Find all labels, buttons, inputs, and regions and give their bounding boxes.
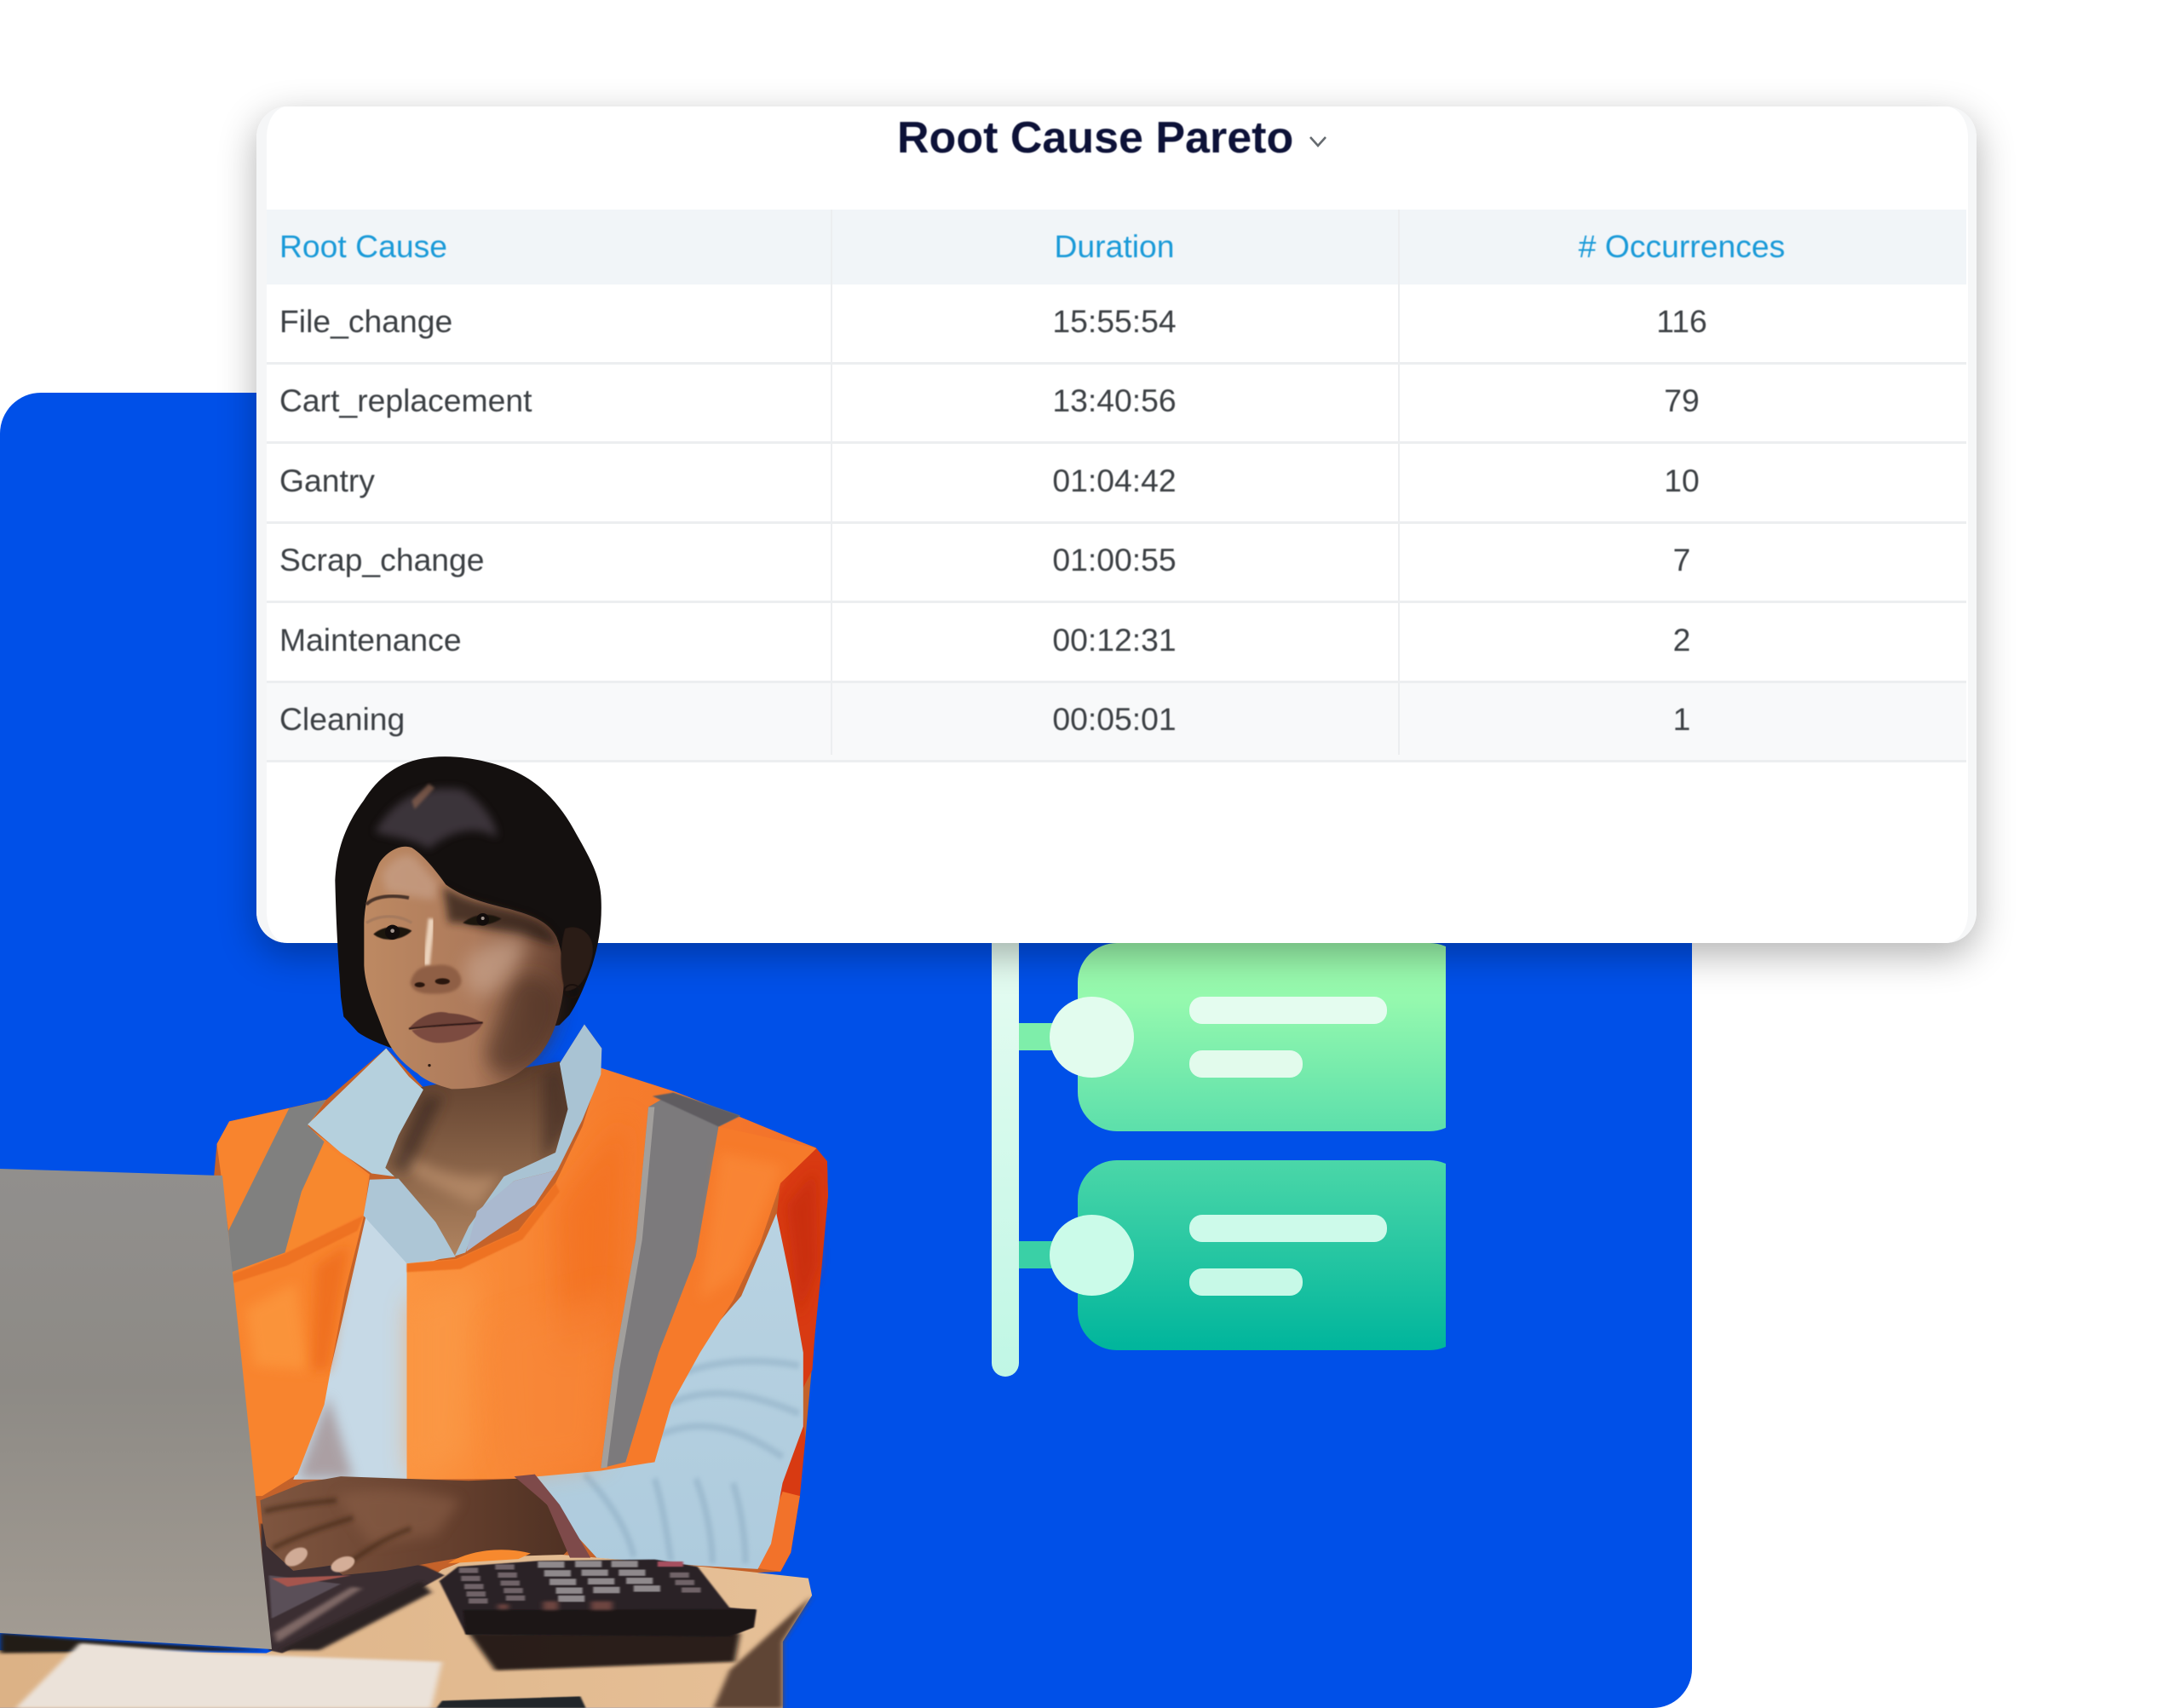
desk side shade [714,1596,812,1708]
face [364,847,564,1089]
eyebrow [366,896,409,905]
row: File_change: File_change [279,303,452,339]
mole [428,1064,431,1067]
row: File_change: 15:55:54 [1052,303,1177,339]
row: Cart_replacement: Cart_replacement [279,382,532,418]
calculator keys [459,1564,700,1603]
row: Cleaning: 00:05:01 [1052,701,1177,737]
table header row [267,210,1966,285]
row: File_change: 116 [1656,303,1707,339]
panel: root cause table card [256,106,1977,943]
forehead highlight [382,855,437,900]
panel: blue background [0,393,1692,1708]
row: Cart_replacement: 79 [1664,382,1700,418]
torso: pale fleece shirt [293,1183,452,1480]
row: Cleaning [279,701,1690,738]
laptop keyboard base [261,1523,445,1653]
body backing silhouette [204,1025,828,1587]
calculator [440,1560,757,1636]
vest back, red inner lining [741,1147,828,1572]
row: Scrap_change: Scrap_change [279,542,485,578]
table: wooden desk [0,1552,812,1708]
row: Cleaning: Cleaning [279,701,405,737]
row: Scrap_change: 7 [1673,542,1690,578]
vest: left panel [217,1100,370,1496]
nose highlight [427,918,432,965]
left eye [373,927,411,940]
notebook on desk [16,1643,586,1708]
column header: # Occurrences: # Occurrences [1579,228,1785,264]
nose [411,964,462,994]
hand on keyboard [260,1475,590,1575]
hair [335,756,601,1050]
shadow under bangs [443,886,556,946]
row: Maintenance: 00:12:31 [1052,622,1177,658]
row: Gantry: 01:04:42 [1052,463,1177,498]
row: Cleaning: 1 [1673,701,1690,737]
sleeve cuff [515,1475,590,1558]
ear [561,928,593,991]
collar: left [308,1049,423,1176]
hair shine [375,788,497,849]
row: Maintenance: Maintenance [279,622,462,658]
collar: under-fold [364,1179,456,1263]
sleeve: right arm in light-blue fleece [518,1213,803,1569]
row: Gantry: Gantry [279,463,375,498]
icon: dropdown chevron [1309,136,1326,147]
vest: right panel [407,1068,816,1480]
row: Maintenance: 2 [1673,622,1690,658]
row: Gantry [279,463,1700,499]
row: Cart_replacement [279,382,1700,419]
neck and chest [382,1061,580,1257]
row: Gantry: 10 [1664,463,1700,498]
collar: right [455,1025,601,1256]
row: File_change [279,303,1707,339]
vest: right shoulder trim [625,1126,816,1462]
heading: Root Cause Pareto: Root Cause Pareto [897,113,1293,163]
cheek highlight [465,939,526,997]
vest: reflective grey stripe [601,1093,740,1468]
column header: Duration: Duration [1055,228,1174,264]
right eye [463,915,501,925]
column header: Root Cause: Root Cause [279,228,447,264]
figure: head with dark bob haircut [335,756,601,1089]
laptop lid [0,1169,272,1649]
row: Cart_replacement: 13:40:56 [1052,382,1177,418]
row: Maintenance [279,622,1690,658]
row: Scrap_change: 01:00:55 [1052,542,1177,578]
figure: torso and vest [204,1025,828,1587]
icon: green timeline with two cards [992,943,1446,1377]
row: Scrap_change [279,542,1690,578]
lips [409,1012,483,1028]
